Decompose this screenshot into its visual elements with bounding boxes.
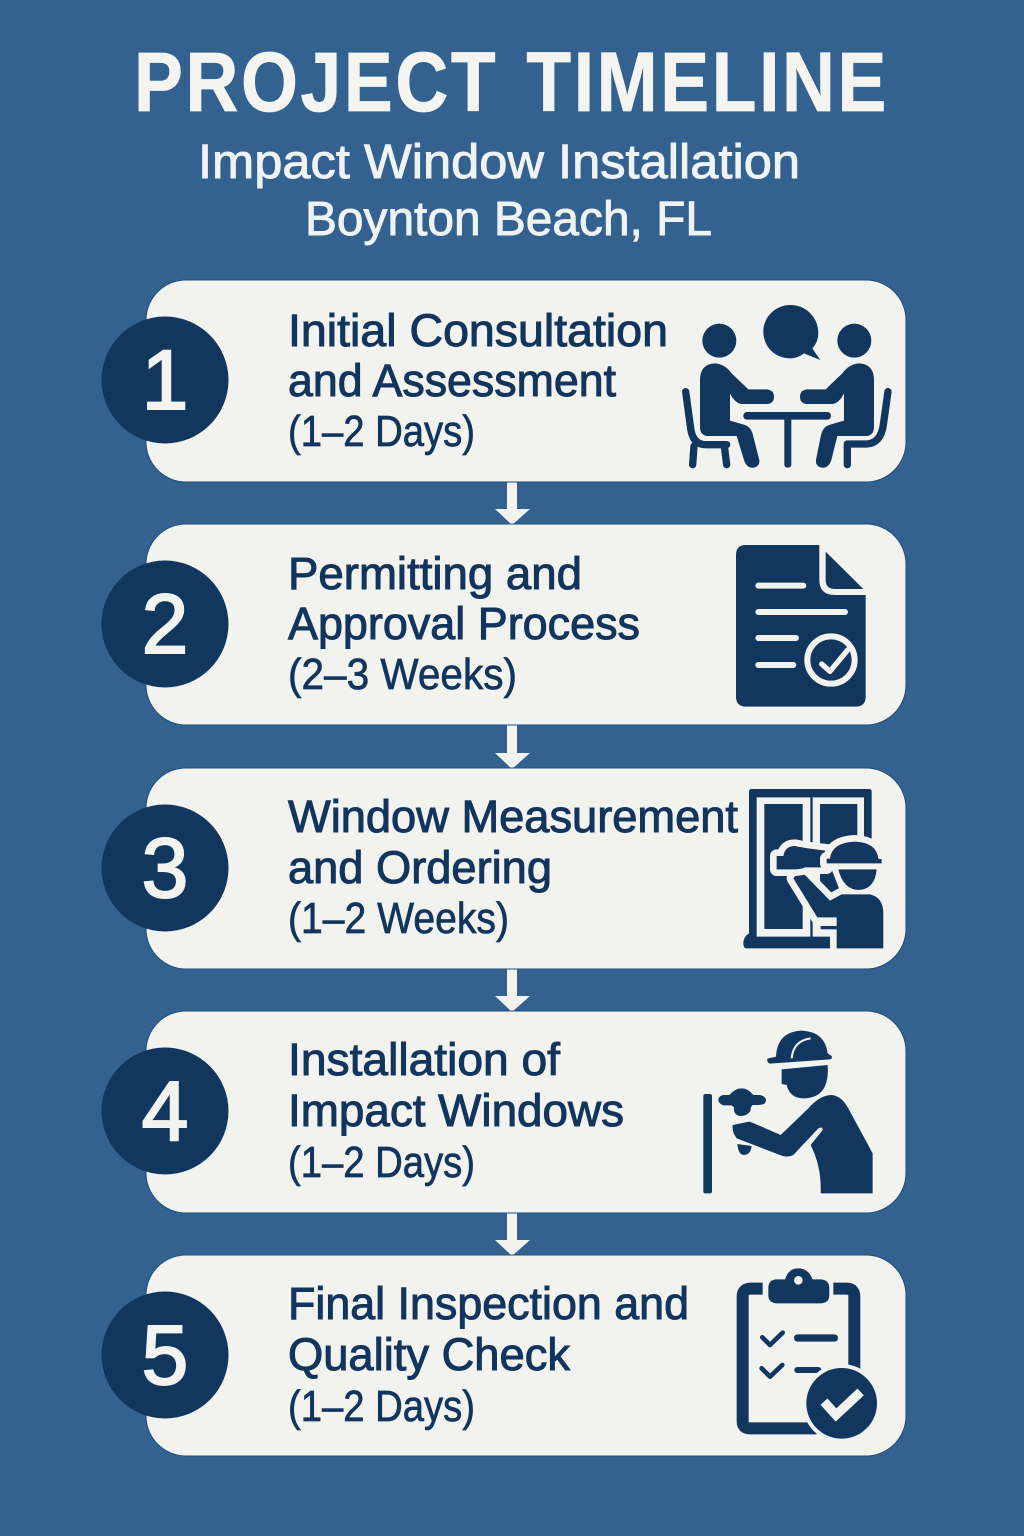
step 2 text: Permitting and bbox=[288, 548, 582, 599]
step 1 text: and Assessment bbox=[288, 355, 616, 406]
arrow: step 1 to 2 bbox=[495, 482, 530, 525]
number badge 3 bbox=[102, 804, 228, 932]
step 4 text: (1–2 Days) bbox=[288, 1138, 475, 1187]
step 3 text bbox=[288, 791, 738, 943]
panel: step 3 window measurement bbox=[102, 768, 906, 969]
subtitle bbox=[198, 136, 800, 246]
subtitle: Impact Window Installation bbox=[198, 136, 800, 189]
step 3 text: (1–2 Weeks) bbox=[288, 894, 509, 943]
step 5 text: Final Inspection and bbox=[288, 1278, 689, 1329]
step 2 text: (2–3 Weeks) bbox=[288, 650, 517, 699]
icon: two people meeting at a table bbox=[686, 305, 888, 468]
number badge 4 bbox=[102, 1048, 228, 1174]
icon: clipboard checklist bbox=[743, 1268, 881, 1443]
panel: step 4 installation bbox=[102, 1011, 906, 1213]
number badge 3: 3 bbox=[142, 821, 188, 915]
number badge 2: 2 bbox=[142, 577, 188, 671]
step 1 text bbox=[288, 305, 668, 456]
card background bbox=[146, 524, 906, 725]
step 2 text: Approval Process bbox=[288, 598, 640, 649]
step 2 text bbox=[288, 548, 640, 699]
number badge 4: 4 bbox=[142, 1064, 188, 1158]
number badge 2 bbox=[102, 560, 228, 688]
number badge 5 bbox=[102, 1292, 228, 1418]
step 4 text bbox=[288, 1034, 624, 1187]
number badge 1: 1 bbox=[142, 333, 188, 427]
panel: step 2 permitting bbox=[102, 524, 906, 725]
card background bbox=[146, 768, 906, 969]
step 1 text: Initial Consultation bbox=[288, 305, 668, 356]
number badge 5: 5 bbox=[142, 1308, 188, 1402]
arrow: step 3 to 4 bbox=[495, 969, 530, 1012]
arrow: step 2 to 3 bbox=[495, 725, 530, 769]
number badge 1 bbox=[102, 316, 228, 444]
subtitle: Boynton Beach, FL bbox=[305, 193, 712, 246]
card background bbox=[146, 1011, 906, 1213]
card background bbox=[146, 1255, 906, 1456]
step 5 text: (1–2 Days) bbox=[288, 1382, 475, 1431]
arrow: step 4 to 5 bbox=[495, 1213, 530, 1256]
step 3 text: Window Measurement bbox=[288, 791, 738, 842]
icon: approved document bbox=[736, 545, 866, 707]
title: PROJECT TIMELINE bbox=[134, 35, 889, 129]
icon: installer with drill bbox=[703, 1031, 873, 1193]
panel: step 5 final inspection bbox=[102, 1255, 906, 1456]
step 3 text: and Ordering bbox=[288, 842, 552, 893]
step 5 text bbox=[288, 1278, 689, 1431]
step 1 text: (1–2 Days) bbox=[288, 407, 475, 456]
panel: step 1 initial consultation bbox=[102, 280, 906, 482]
step 5 text: Quality Check bbox=[288, 1329, 571, 1380]
icon: worker measuring a window bbox=[743, 789, 883, 948]
step 4 text: Installation of bbox=[288, 1034, 561, 1085]
step 4 text: Impact Windows bbox=[288, 1085, 624, 1136]
card background bbox=[146, 280, 906, 482]
